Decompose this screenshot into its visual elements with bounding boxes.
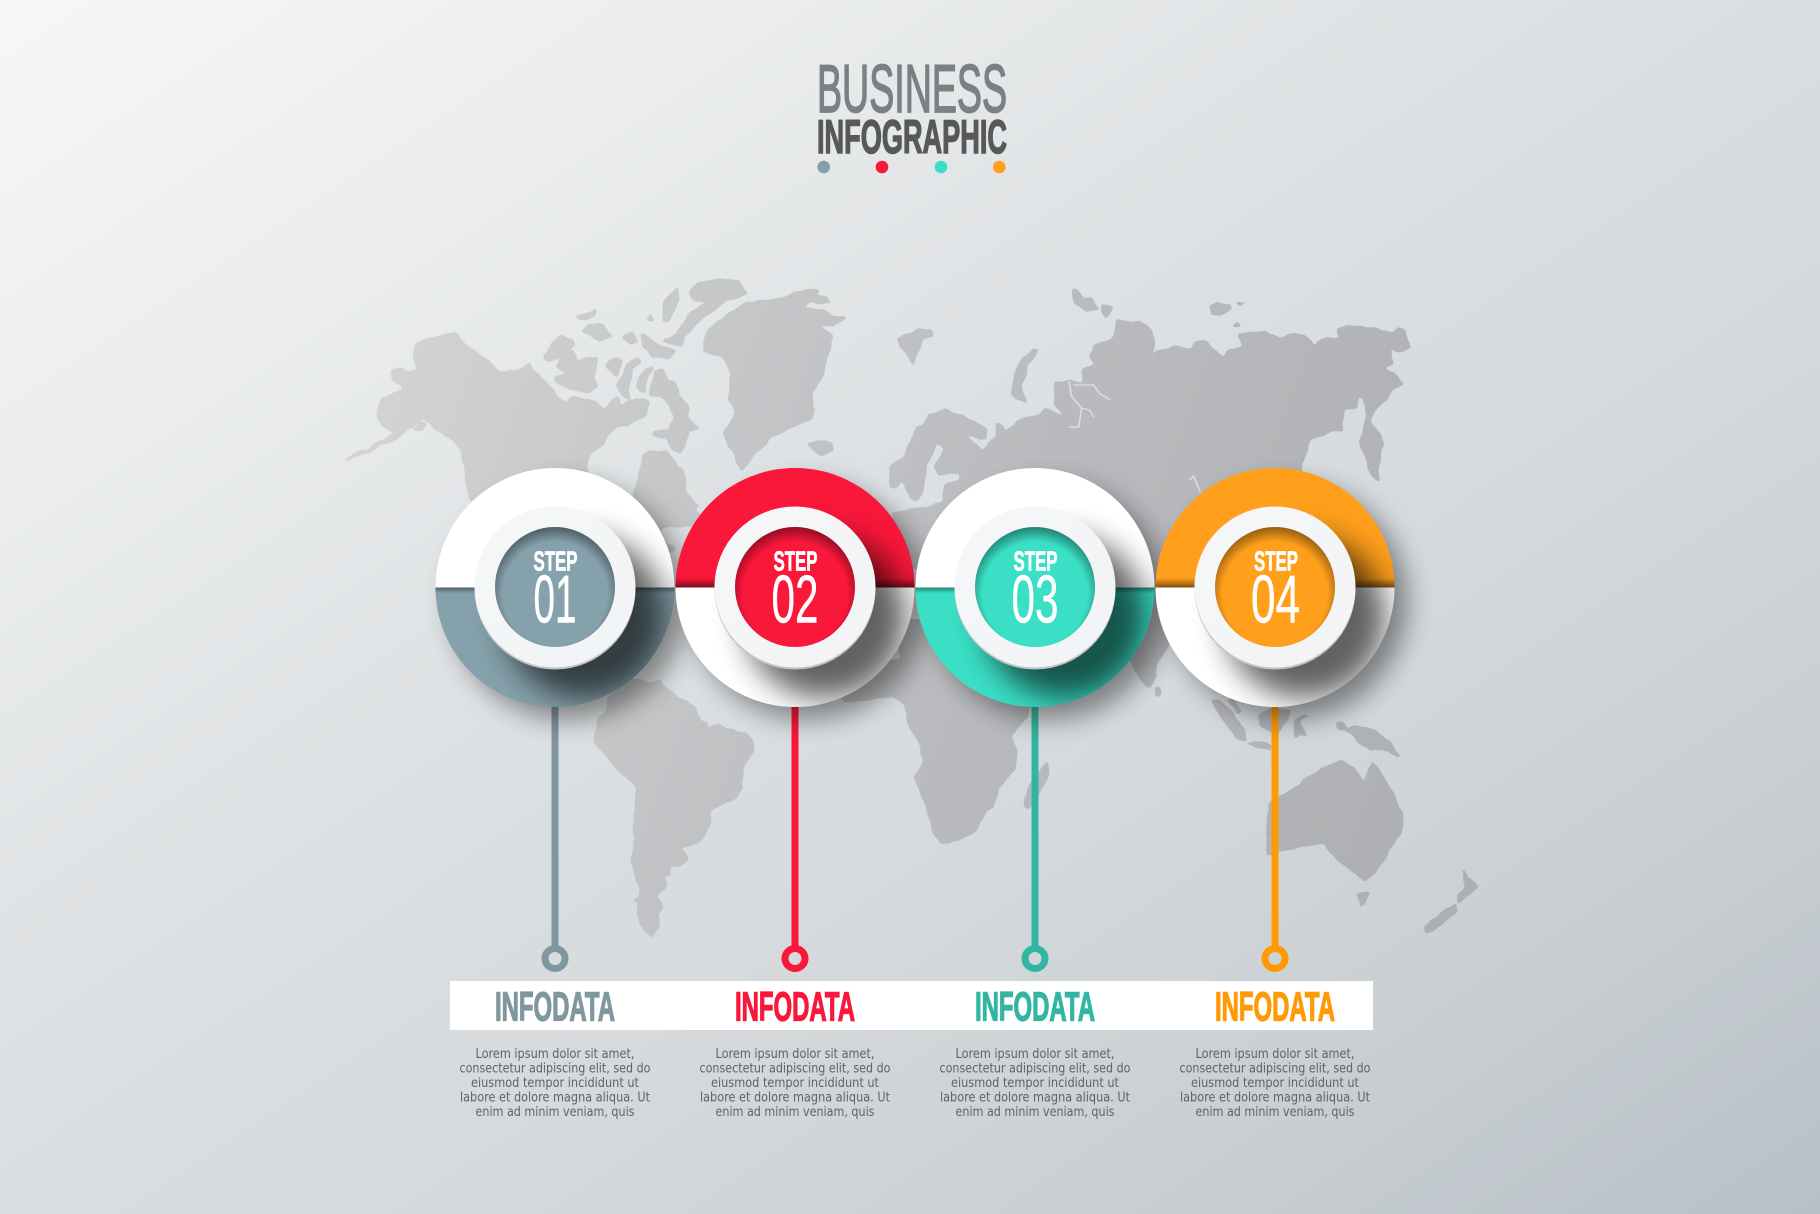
connector 4 xyxy=(1265,706,1285,968)
heading: infodata 1: INFODATA xyxy=(495,983,615,1029)
text block 4: Lorem ipsum dolor sit amet, xyxy=(1196,1046,1354,1062)
title xyxy=(817,52,1007,173)
text block 1: Lorem ipsum dolor sit amet, xyxy=(476,1046,634,1062)
step 2 circle xyxy=(670,460,927,720)
step 3 label: STEP xyxy=(1014,546,1058,577)
world map xyxy=(340,270,1490,950)
title line: BUSINESS: BUSINESS xyxy=(817,52,1007,127)
white label bar xyxy=(450,981,1373,1030)
heading: infodata 2: INFODATA xyxy=(735,983,855,1029)
step 1 number: 01 xyxy=(534,562,576,638)
text block 4: eiusmod tempor incididunt ut xyxy=(1191,1075,1359,1091)
connector 1 xyxy=(545,706,565,968)
text block 3: labore et dolore magna aliqua. Ut xyxy=(940,1090,1130,1106)
text block 1: enim ad minim veniam, quis xyxy=(476,1104,634,1120)
text block 3: Lorem ipsum dolor sit amet, xyxy=(956,1046,1114,1062)
text block 3: eiusmod tempor incididunt ut xyxy=(951,1075,1119,1091)
heading: infodata 3: INFODATA xyxy=(975,983,1095,1029)
step 4 number: 04 xyxy=(1251,562,1300,638)
text block 3: consectetur adipiscing elit, sed do xyxy=(940,1061,1130,1077)
text block 4: enim ad minim veniam, quis xyxy=(1196,1104,1354,1120)
step 1 circle xyxy=(430,460,687,720)
text block 2: Lorem ipsum dolor sit amet, xyxy=(716,1046,874,1062)
text block 4: consectetur adipiscing elit, sed do xyxy=(1180,1061,1370,1077)
text block 1: consectetur adipiscing elit, sed do xyxy=(460,1061,650,1077)
step 4 label: STEP xyxy=(1254,546,1298,577)
text block 1: labore et dolore magna aliqua. Ut xyxy=(460,1090,650,1106)
text block 4: labore et dolore magna aliqua. Ut xyxy=(1180,1090,1370,1106)
step 3 number: 03 xyxy=(1012,562,1058,638)
text block 1 xyxy=(460,1046,650,1120)
step 4 circle xyxy=(1150,460,1407,720)
text block 3 xyxy=(940,1046,1130,1120)
title line: INFOGRAPHIC: INFOGRAPHIC xyxy=(817,111,1007,164)
text block 2: enim ad minim veniam, quis xyxy=(716,1104,874,1120)
text block 2 xyxy=(700,1046,890,1120)
text block 2: consectetur adipiscing elit, sed do xyxy=(700,1061,890,1077)
heading: infodata 4: INFODATA xyxy=(1215,983,1335,1029)
step 2 label: STEP xyxy=(774,546,818,577)
step 2 number: 02 xyxy=(772,562,818,638)
text block 2: eiusmod tempor incididunt ut xyxy=(711,1075,879,1091)
step 3 circle xyxy=(910,460,1167,720)
text block 4 xyxy=(1180,1046,1370,1120)
connector 2 xyxy=(785,706,805,968)
step 1 label: STEP xyxy=(534,546,578,577)
text block 2: labore et dolore magna aliqua. Ut xyxy=(700,1090,890,1106)
text block 3: enim ad minim veniam, quis xyxy=(956,1104,1114,1120)
text block 1: eiusmod tempor incididunt ut xyxy=(471,1075,639,1091)
title colour dots xyxy=(817,161,1006,173)
connector 3 xyxy=(1025,706,1045,968)
